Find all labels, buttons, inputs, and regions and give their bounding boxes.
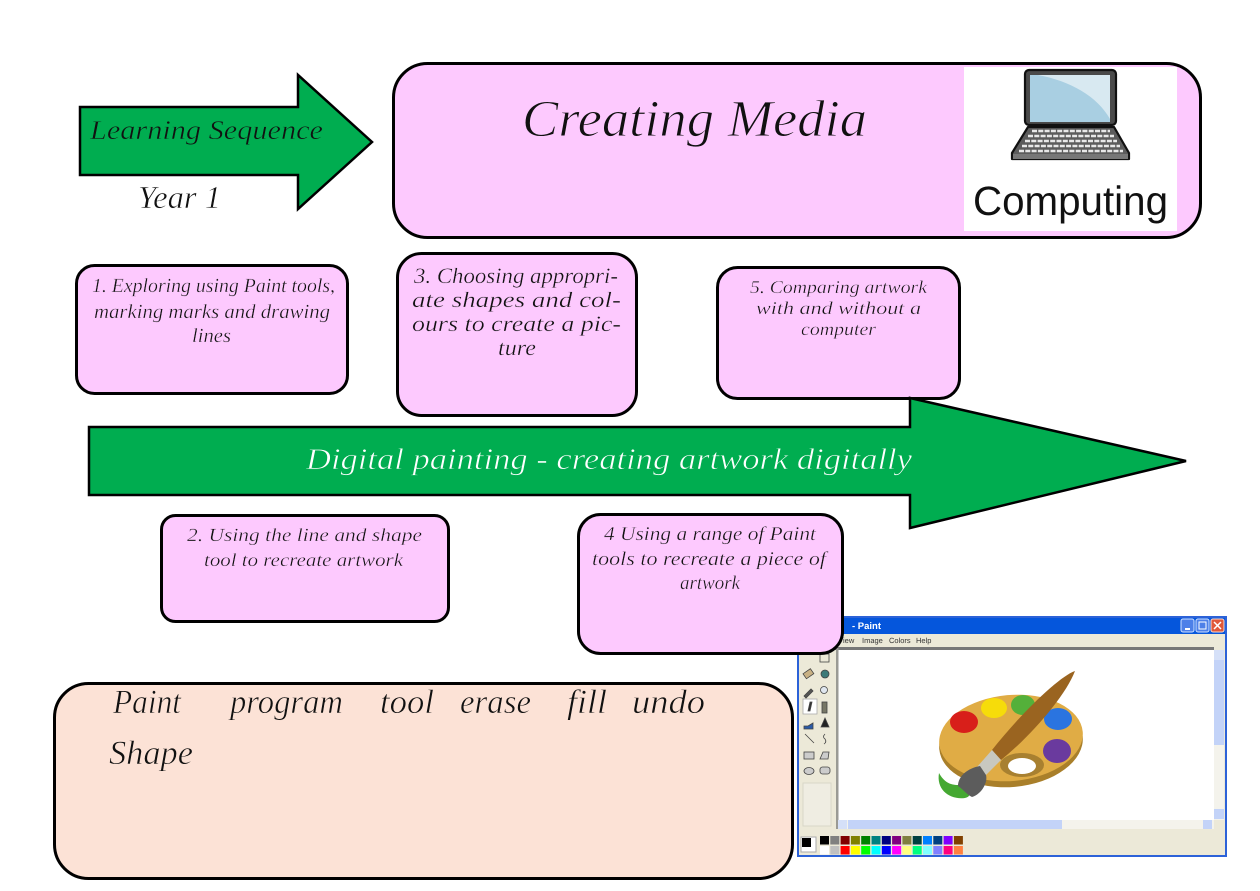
panel: vocabulary: Shape <box>109 735 193 772</box>
label: year: Year 1 <box>138 179 221 215</box>
panel: title banner <box>394 64 1200 238</box>
panel: step 4: artwork <box>680 573 740 594</box>
panel: step 5 <box>718 268 960 398</box>
colour palette <box>801 836 963 854</box>
panel: step 1 <box>76 266 348 394</box>
title bar <box>799 618 1225 634</box>
panel: step 2: 2. Using the line and shape <box>187 526 422 546</box>
panel: step 3: ours to create a pic- <box>412 311 621 336</box>
panel: step 1: marking marks and drawing <box>94 301 330 323</box>
icon: computing laptop card <box>964 67 1177 231</box>
panel: step 4: 4 Using a range of Paint <box>604 524 817 545</box>
arrow: learning sequence <box>80 75 372 209</box>
panel: vocabulary: fill <box>567 684 607 721</box>
panel: step 1: 1. Exploring using Paint tools, <box>92 275 335 297</box>
image: paint program window: Help <box>916 636 931 645</box>
panel: step 3 <box>398 254 636 416</box>
image: paint program window: Colors <box>889 636 911 645</box>
vertical scrollbar <box>1214 650 1224 820</box>
panel: vocabulary: erase <box>460 684 531 721</box>
panel: step 5: 5. Comparing artwork <box>750 277 928 297</box>
icon: artist palette <box>935 671 1087 798</box>
panel: step 1: lines <box>192 325 231 347</box>
arrow: digital painting <box>89 398 1186 528</box>
arrow label: Digital painting - creating artwork digitally <box>305 443 913 476</box>
heading: learning sequence: Learning Sequence <box>89 115 323 145</box>
image: paint program window: - Paint <box>852 621 882 632</box>
toolbox icons <box>803 654 830 774</box>
panel: step 5: computer <box>801 319 877 339</box>
panel: step 2: tool to recreate artwork <box>204 551 404 571</box>
panel: vocabulary <box>54 684 792 878</box>
canvas <box>835 647 1214 650</box>
title: Creating Media <box>522 91 867 148</box>
panel: step 4: tools to recreate a piece of <box>592 549 829 570</box>
panel: vocabulary: tool <box>380 684 434 721</box>
icon: laptop <box>1012 70 1129 159</box>
panel: step 2 <box>162 516 448 622</box>
horizontal scrollbar <box>838 820 1214 829</box>
image: paint program window <box>798 617 1226 856</box>
panel: step 3: 3. Choosing appropri- <box>413 263 618 288</box>
panel: vocabulary: program <box>228 684 343 721</box>
panel: vocabulary: undo <box>632 684 705 721</box>
image: paint program window: Image <box>862 636 883 645</box>
label: computing: Computing <box>973 178 1168 224</box>
menu: iew <box>843 636 855 645</box>
panel: vocabulary: Paint <box>112 684 182 721</box>
panel: step 3: ate shapes and col- <box>412 287 621 312</box>
panel: step 4 <box>578 514 842 654</box>
panel: step 5: with and without a <box>756 298 921 318</box>
window buttons <box>1181 619 1224 632</box>
panel: step 3: ture <box>498 335 536 360</box>
